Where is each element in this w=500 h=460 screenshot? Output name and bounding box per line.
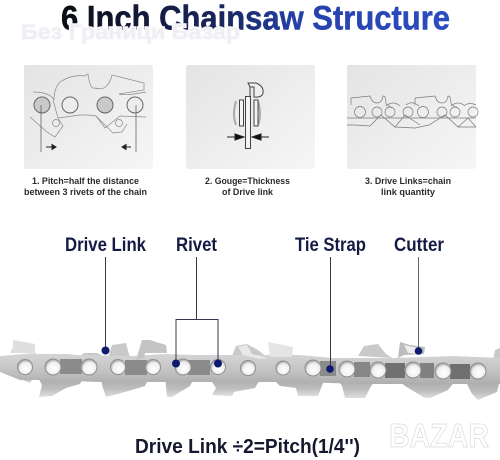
panel: drive links [347,65,478,169]
chain outline diagram [347,96,478,128]
caption 3: link quantity [381,187,436,198]
label: Cutter: Cutter [394,235,445,256]
leader lines [106,257,418,369]
caption 3: 3. Drive Links=chain [365,176,451,187]
watermark: Без Граници Базар [21,21,240,44]
panel: pitch [24,65,153,169]
caption 1 [24,176,147,198]
label: Tie Strap: Tie Strap [295,235,366,256]
caption 1: between 3 rivets of the chain [24,187,147,198]
rivets [18,359,486,379]
side plates [0,353,500,384]
caption 2: 2. Gouge=Thickness [205,176,290,187]
pitch diagram [30,74,146,152]
cutters [10,340,425,360]
marker dots [102,346,422,373]
label: Drive Link: Drive Link [65,235,146,256]
arrows [46,144,131,150]
gauge diagram [234,83,263,148]
title: 6 Inch Chainsaw Structure [61,0,450,38]
drive link tops [78,343,500,362]
caption 3 [365,176,451,198]
label: Rivet: Rivet [176,235,218,256]
chain [0,340,500,400]
dark tie straps [60,359,470,379]
caption 2: of Drive link [222,187,274,198]
formula: Drive Link ÷2=Pitch(1/4'') [135,436,360,458]
caption 1: 1. Pitch=half the distance [32,176,139,187]
drive link teeth [13,374,500,400]
caption 2 [205,176,290,198]
arrows [227,134,269,140]
panel: gauge [186,65,315,169]
